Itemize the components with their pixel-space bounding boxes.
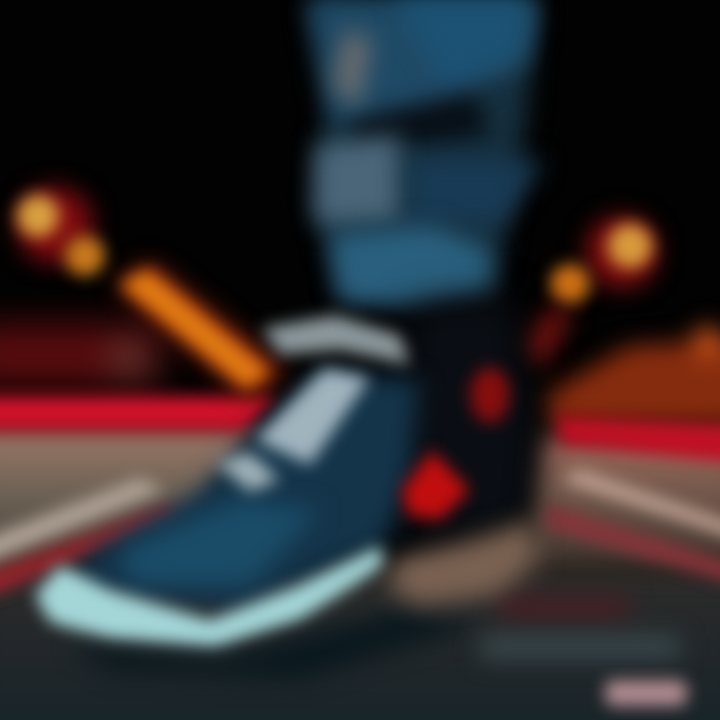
foreground: road markings [480,600,680,659]
left red light band [0,396,278,430]
shoe: toe highlight [120,500,320,585]
background: road surface [0,425,720,720]
left background: dark red glow [0,325,160,385]
left lamp: small [65,236,105,276]
left road streak [0,478,180,600]
shoe: red heel patch [402,450,470,520]
right lamp: small [550,264,590,304]
right red streak [522,305,572,370]
right road streak [540,470,720,585]
right red light band [555,416,720,464]
shoe: beige heel sole [390,520,540,605]
shoe: white sole [35,545,385,648]
jeans [305,0,545,305]
shoe: red upper patch [470,367,510,423]
shoe: sole shadow [70,610,480,680]
left orange light bar [115,262,285,400]
right lamp: large [586,216,658,288]
shoe: laces [255,368,370,465]
right background: orange building glow [545,326,720,425]
shoe: collar strap [262,315,410,365]
left lamp: large [17,187,93,263]
shoe [35,295,540,680]
jeans: base shape [305,0,540,300]
shoe: upper [70,370,420,610]
shoe: collar shadow and heel [400,295,535,545]
foreground: logo smudge [605,680,687,706]
shoe: lower lace [215,452,280,492]
